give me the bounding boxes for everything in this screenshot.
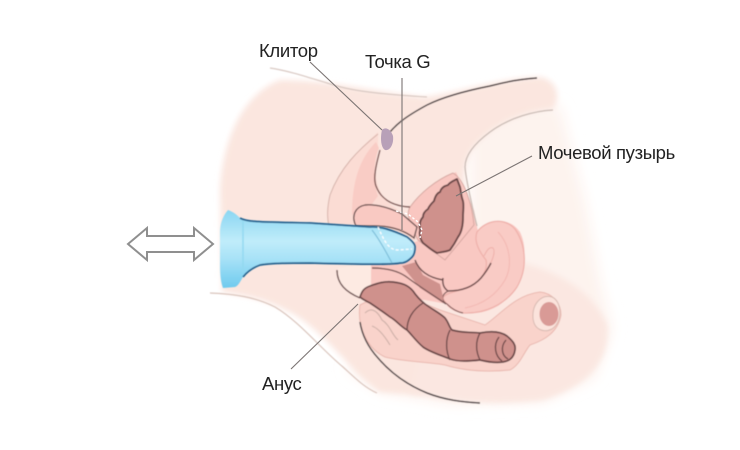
lower bowel pocket [359, 290, 561, 371]
label: clitoris: Клитор [259, 40, 318, 61]
leader line: bladder [456, 156, 532, 196]
icon: double arrow [128, 228, 213, 260]
label: bladder: Мочевой пузырь [538, 142, 675, 163]
outer body lines [390, 78, 537, 132]
folds near anus [365, 310, 398, 345]
device [220, 210, 415, 288]
perineum [337, 264, 371, 297]
leader line: anus [291, 304, 358, 369]
uterus [443, 221, 524, 313]
leader line: clitoris [310, 62, 382, 130]
lower body tint [410, 255, 607, 403]
clitoris marker [381, 128, 393, 150]
bladder outer wall [408, 173, 474, 260]
label: anus: Анус [262, 373, 302, 394]
G spot dotted circle [396, 211, 422, 238]
pale belly and lower body [345, 105, 612, 404]
bladder [420, 179, 463, 253]
rectum [360, 282, 515, 362]
leader line: G spot [401, 78, 403, 230]
urethra [354, 205, 417, 238]
outer labia fold [327, 132, 420, 240]
body silhouette [220, 77, 557, 395]
tailbone [533, 296, 560, 331]
pelvic pink background [370, 172, 525, 313]
lower vaginal wall [402, 262, 443, 303]
label: G spot: Точка G [365, 51, 430, 72]
